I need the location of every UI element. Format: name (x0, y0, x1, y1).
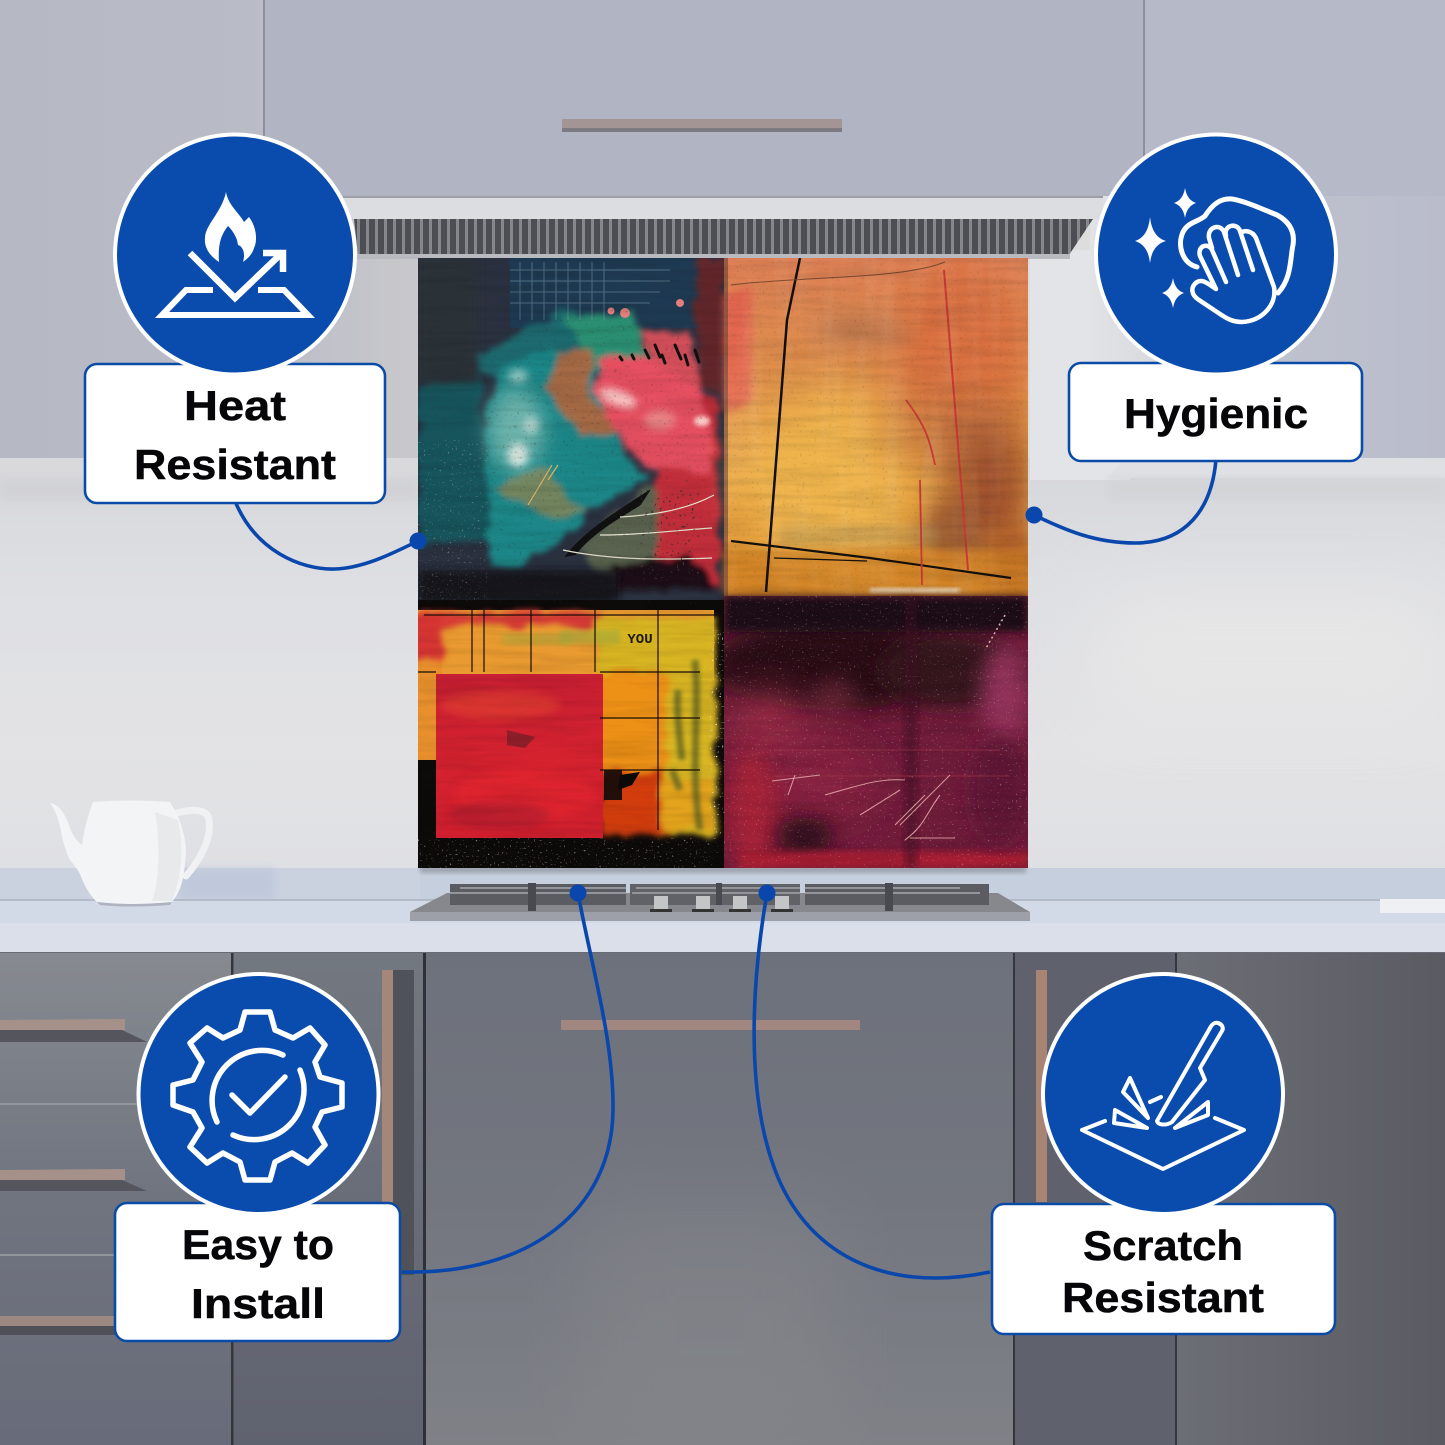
paint texture overlays (418, 258, 1028, 868)
label box: heat resistant: Resistant (134, 441, 336, 488)
connector: hygienic (1026, 459, 1216, 543)
quadrant: orange and gold (724, 258, 1032, 598)
icon: hygienic hand wiping with sparkles (1094, 132, 1338, 376)
wall (0, 458, 1445, 873)
upper left cabinet (0, 0, 420, 458)
connector: scratch resistant (754, 884, 990, 1278)
gas hob (410, 883, 1030, 921)
counter top (0, 868, 1445, 953)
quadrant: yellow and red (412, 600, 724, 868)
quadrant: teal and pink (418, 258, 724, 604)
extractor hood (343, 196, 1103, 259)
label box: easy to install: Easy to (182, 1221, 334, 1268)
label box: heat resistant: Heat (184, 382, 286, 429)
label box: scratch resistant: Scratch (1083, 1222, 1243, 1269)
quadrant: crimson and maroon (710, 596, 1030, 870)
label box: heat resistant (85, 364, 385, 503)
connector lines and dots (235, 459, 1216, 1278)
label box: scratch resistant: Resistant (1062, 1274, 1264, 1321)
shadow under panel (420, 865, 1026, 873)
label box: hygienic: Hygienic (1124, 390, 1308, 437)
upper right cabinet (1090, 196, 1445, 458)
teapot (50, 800, 209, 906)
label box: scratch resistant (992, 1204, 1335, 1334)
label box: easy to install (115, 1203, 400, 1341)
connector: heat resistant (235, 501, 426, 569)
icon: easy to install gear with check (136, 972, 380, 1216)
quadrant: yellow and red: YOU (627, 632, 653, 648)
label box: hygienic (1069, 363, 1362, 461)
cabinet handles (0, 970, 1047, 1335)
icon: scratch resistant knife on surface (1041, 972, 1285, 1216)
upper cabinet handle (562, 119, 842, 132)
connector: easy to install (402, 884, 613, 1272)
lower cabinets (0, 952, 1445, 1445)
abstract painting panel (412, 258, 1032, 870)
upper centre cabinet (265, 0, 1143, 197)
label box: easy to install: Install (191, 1280, 325, 1327)
icon: heat resistant flame on surface (113, 132, 357, 376)
